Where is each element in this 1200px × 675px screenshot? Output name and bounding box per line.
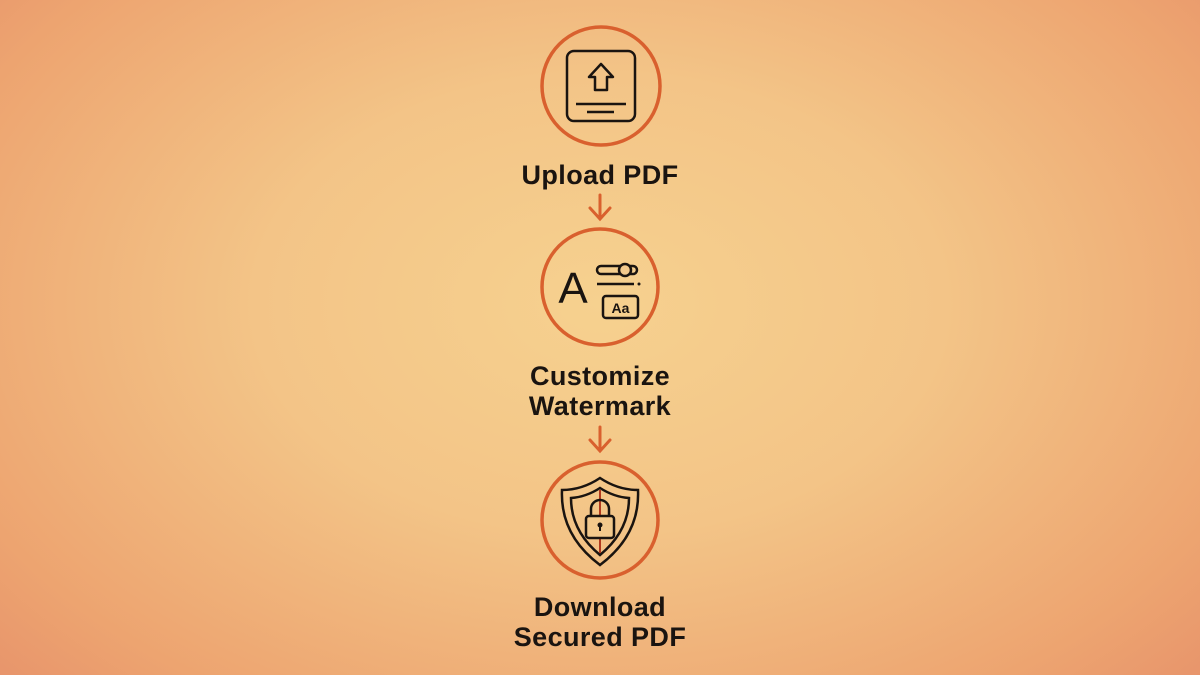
label: Download Secured PDF: Secured PDF <box>514 622 686 652</box>
step 3 icon: secure shield <box>542 462 658 578</box>
step 2 icon: customize: Aa <box>612 300 630 316</box>
step 2 icon: customize <box>542 229 658 345</box>
arrow 2 <box>590 427 610 451</box>
step 2 icon: customize: A <box>558 264 588 313</box>
arrow 1 <box>590 195 610 219</box>
label: Download Secured PDF: Download <box>534 592 666 622</box>
step 1 icon: upload <box>542 27 660 145</box>
label: Customize Watermark <box>528 361 671 421</box>
label: Download Secured PDF <box>514 592 686 652</box>
label: Customize Watermark: Customize <box>530 361 670 391</box>
label: Upload PDF: Upload PDF <box>522 160 678 190</box>
label: Customize Watermark: Watermark <box>529 391 671 421</box>
